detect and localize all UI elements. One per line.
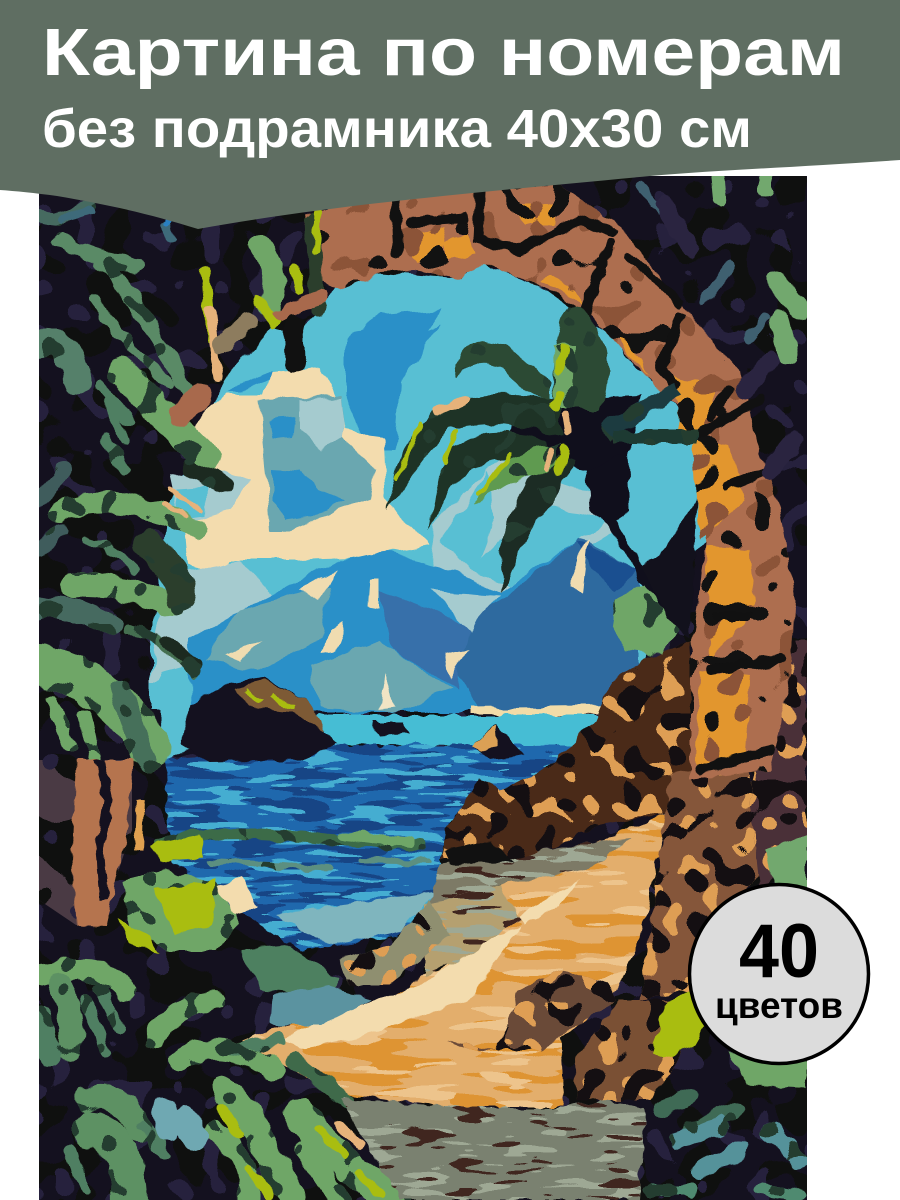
hanging vines: [62, 210, 322, 515]
badge: 40 colours: 40: [739, 909, 819, 994]
lower rock column: [640, 640, 807, 1000]
badge: 40 colours: цветов: [715, 985, 843, 1026]
small rock in the water: [472, 725, 525, 760]
sailboat: [372, 672, 410, 736]
lower right foliage: [650, 835, 807, 1195]
lower left plants: [39, 835, 450, 1200]
left foliage: [39, 205, 225, 760]
title: Картина по номерам: [42, 15, 845, 90]
subtitle: без подрамника 40х30 см: [42, 99, 752, 159]
sea: [160, 715, 615, 950]
palm crown: [510, 395, 640, 470]
top right foliage: [640, 178, 800, 470]
water-plant band: [160, 834, 430, 868]
distant clouds behind palm: [430, 460, 615, 592]
shore rocks: [440, 640, 700, 1100]
header banner: [0, 0, 900, 229]
sandy path: [240, 812, 670, 1108]
foreground ground: [340, 1098, 645, 1200]
mountains: [189, 539, 640, 717]
palm tree: [388, 305, 697, 655]
cumulus cloud: [150, 368, 430, 760]
left rock: [39, 760, 140, 926]
sky: [150, 263, 707, 710]
rock island: [182, 678, 335, 762]
badge: 40 colours: [690, 884, 868, 1064]
foliage behind palm on right: [640, 500, 697, 640]
painting: tropical cove seen through a rock arch: [39, 176, 807, 1200]
stone arch: [305, 185, 795, 780]
